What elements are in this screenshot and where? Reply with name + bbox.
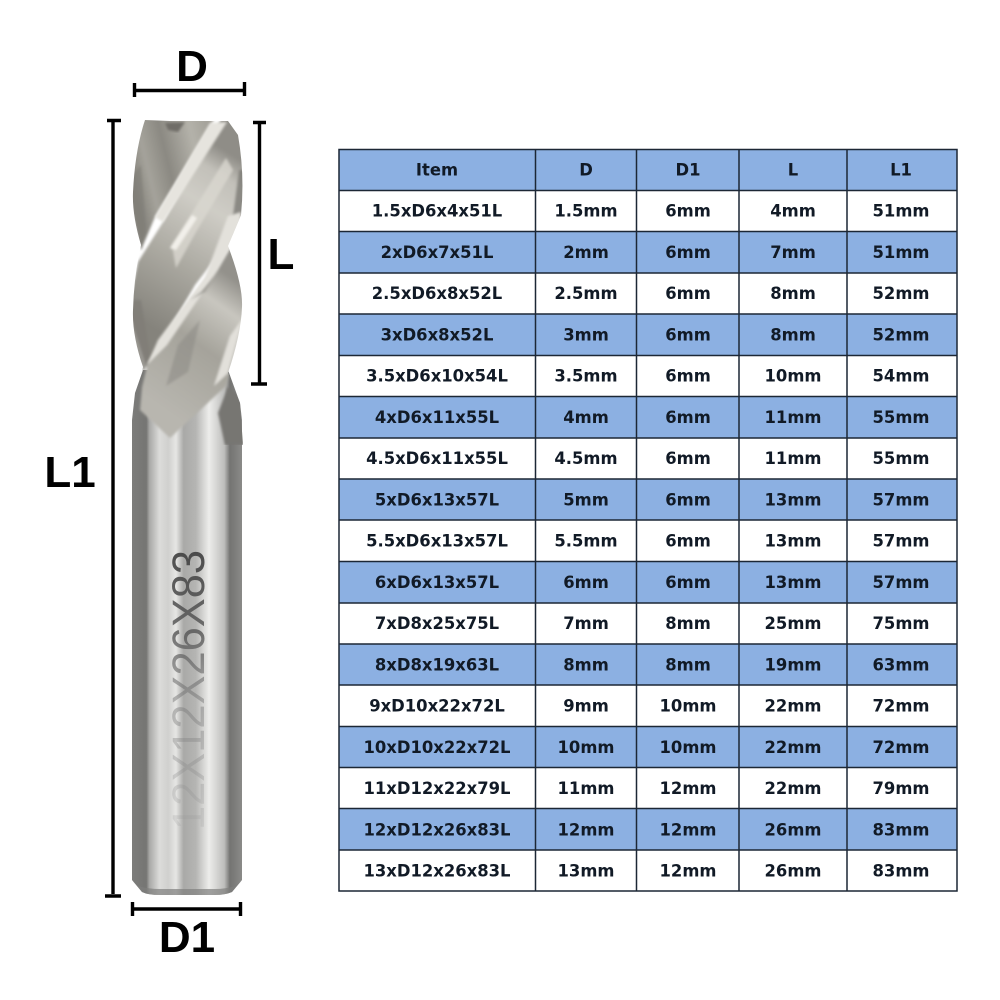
row: 6: [375, 573, 929, 592]
row: 11: [363, 779, 929, 798]
row: 5.5: [366, 532, 929, 550]
dimension: L1: L1: [44, 448, 96, 497]
row: header: [416, 160, 912, 180]
row: 13: 12mm: [660, 862, 716, 880]
row: 5.5: 6mm: [665, 532, 711, 550]
dimension: D1: [132, 902, 241, 962]
row: 12: 26mm: [765, 820, 821, 840]
row: header: Item: [416, 160, 458, 180]
row: 4.5: 55mm: [873, 449, 929, 468]
cutter flutes: [128, 115, 248, 445]
row: 3.5: 10mm: [765, 366, 821, 386]
lower face shading: [166, 320, 200, 386]
row: 12: 12mm: [660, 820, 716, 840]
row: 3.5: 3.5mm: [554, 366, 618, 386]
row: 5: 6mm: [665, 490, 711, 510]
row: 2.5: 8mm: [770, 284, 816, 303]
row: 4: 55mm: [873, 408, 929, 427]
row: 11: 79mm: [873, 779, 929, 798]
row: 2: 51mm: [873, 243, 929, 262]
row: 7: 7mm: [563, 614, 609, 633]
row: 4.5: 4.5xD6x11x55L: [366, 449, 508, 468]
row: 4: 11mm: [765, 408, 821, 427]
row: 5: 13mm: [765, 490, 821, 510]
row: 11: 11mm: [558, 779, 614, 798]
row: 12: 12mm: [558, 820, 614, 840]
row: 4.5: 11mm: [765, 449, 821, 468]
row: 6: 6xD6x13x57L: [375, 573, 499, 592]
row: 3.5: 54mm: [873, 366, 929, 386]
chipped tip: [165, 122, 185, 132]
row: 9: 10mm: [660, 696, 716, 716]
row: 3.5: 3.5xD6x10x54L: [366, 366, 508, 386]
row: 2.5: [372, 284, 929, 303]
upper band: [155, 122, 227, 222]
row: 2: 2xD6x7x51L: [381, 243, 493, 262]
middle band: [147, 212, 241, 365]
band dark segment: [192, 278, 212, 299]
row: 2: 7mm: [770, 243, 816, 262]
row: 3: 6mm: [665, 326, 711, 344]
row: 2.5: 52mm: [873, 284, 929, 303]
row: 5: [375, 490, 929, 510]
row: 3: 3xD6x8x52L: [381, 326, 493, 344]
table: size chart: [339, 149, 957, 891]
dimension: D1: D1: [159, 913, 215, 962]
row: 8: 19mm: [765, 656, 821, 674]
row: 13: 83mm: [873, 862, 929, 880]
row: 3: 8mm: [770, 326, 816, 344]
main face: [128, 118, 245, 368]
row: 4: 6mm: [665, 408, 711, 427]
row: 5: 57mm: [873, 490, 929, 510]
table grid: [339, 149, 957, 891]
row: 11: 22mm: [765, 779, 821, 798]
row: 2: 6mm: [665, 243, 711, 262]
row: 5.5: 13mm: [765, 532, 821, 550]
row: 2: 2mm: [563, 243, 609, 262]
row: 8: [375, 656, 929, 674]
row: 9: 9xD10x22x72L: [369, 696, 505, 716]
row: 6: 57mm: [873, 573, 929, 592]
row: 1.5: 51mm: [873, 202, 929, 220]
row: 13: 13mm: [558, 862, 614, 880]
row: 7: 25mm: [765, 614, 821, 633]
row: 2: [381, 243, 929, 262]
row: 4.5: 4.5mm: [554, 449, 618, 468]
row: 4: [375, 408, 929, 427]
row: 12: [363, 820, 929, 840]
row: 2.5: 6mm: [665, 284, 711, 303]
row: 11: 11xD12x22x79L: [363, 779, 511, 798]
row: 8: 8mm: [563, 656, 609, 674]
row: 3: [381, 326, 929, 344]
row: 3.5: [366, 366, 929, 386]
row: 8: 8xD8x19x63L: [375, 656, 499, 674]
row: 1.5: 1.5xD6x4x51L: [372, 202, 502, 220]
icon: end mill cutter: [128, 115, 248, 895]
row: 4: 4mm: [563, 408, 609, 427]
row: 2.5: 2.5mm: [554, 284, 618, 303]
row: 10: [363, 738, 929, 757]
row: 5.5: 57mm: [873, 532, 929, 550]
lower left flute dark: [133, 300, 148, 372]
row: 13: [363, 862, 929, 880]
row: 3.5: 6mm: [665, 366, 711, 386]
row: 1.5: [372, 202, 929, 220]
dimension: D: [134, 42, 245, 97]
row: 9: [369, 696, 929, 716]
right edge shadow: [232, 170, 242, 218]
row: header: L1: [890, 160, 912, 180]
row: 12: 83mm: [873, 820, 929, 840]
row: 10: 72mm: [873, 738, 929, 757]
row: 3: 3mm: [563, 326, 609, 344]
row: 9: 72mm: [873, 696, 929, 716]
cutter shank chamfer: [132, 880, 242, 895]
row: 13: 26mm: [765, 862, 821, 880]
row: 5.5: 5.5xD6x13x57L: [366, 532, 508, 550]
row: 12: 12xD12x26x83L: [363, 820, 511, 840]
shank shoulder shadow: [218, 387, 245, 445]
row: 7: 75mm: [873, 614, 929, 633]
row: 10: 10mm: [660, 738, 716, 757]
row: 7: 8mm: [665, 614, 711, 633]
table stripes: [339, 149, 957, 850]
row: 1.5: 6mm: [665, 202, 711, 220]
cutter shank engraving: 12X12X26X83: [163, 550, 214, 830]
row: 1.5: 4mm: [770, 202, 816, 220]
row: 4.5: 6mm: [665, 449, 711, 468]
dimension: L: L: [268, 230, 294, 279]
row: 3: 52mm: [873, 326, 929, 344]
cutter shank: [132, 370, 242, 895]
row: 10: 22mm: [765, 738, 821, 757]
row: 9: 9mm: [563, 696, 609, 716]
right band lower: [214, 321, 240, 386]
row: 13: 13xD12x26x83L: [363, 862, 511, 880]
row: 6: 6mm: [563, 573, 609, 592]
dimension: L: [251, 122, 294, 384]
row: 4: 4xD6x11x55L: [375, 408, 499, 427]
row: 5: 5xD6x13x57L: [375, 490, 499, 510]
row: 7: 7xD8x25x75L: [375, 614, 499, 633]
row: 4.5: [366, 449, 929, 468]
row: 5: 5mm: [563, 490, 609, 510]
row: 2.5: 2.5xD6x8x52L: [372, 284, 502, 303]
dimension: L1: [44, 120, 121, 896]
row: 1.5: 1.5mm: [554, 202, 618, 220]
lower face and tip: [140, 243, 248, 438]
row: 8: 63mm: [873, 656, 929, 674]
dimension: D: D: [176, 42, 208, 91]
row: 6: 13mm: [765, 573, 821, 592]
row: 10: 10mm: [558, 738, 614, 757]
row: header: L: [788, 160, 798, 180]
main face highlight: [172, 158, 233, 268]
row: header: D: [579, 160, 593, 180]
row: 8: 8mm: [665, 656, 711, 674]
row: 9: 22mm: [765, 696, 821, 716]
row: 10: 10xD10x22x72L: [363, 738, 511, 757]
row: 11: 12mm: [660, 779, 716, 798]
row: 6: 6mm: [665, 573, 711, 592]
row: 7: [375, 614, 929, 633]
upper flute: [128, 115, 215, 250]
row: 5.5: 5.5mm: [554, 532, 618, 550]
row: header: D1: [675, 160, 701, 180]
